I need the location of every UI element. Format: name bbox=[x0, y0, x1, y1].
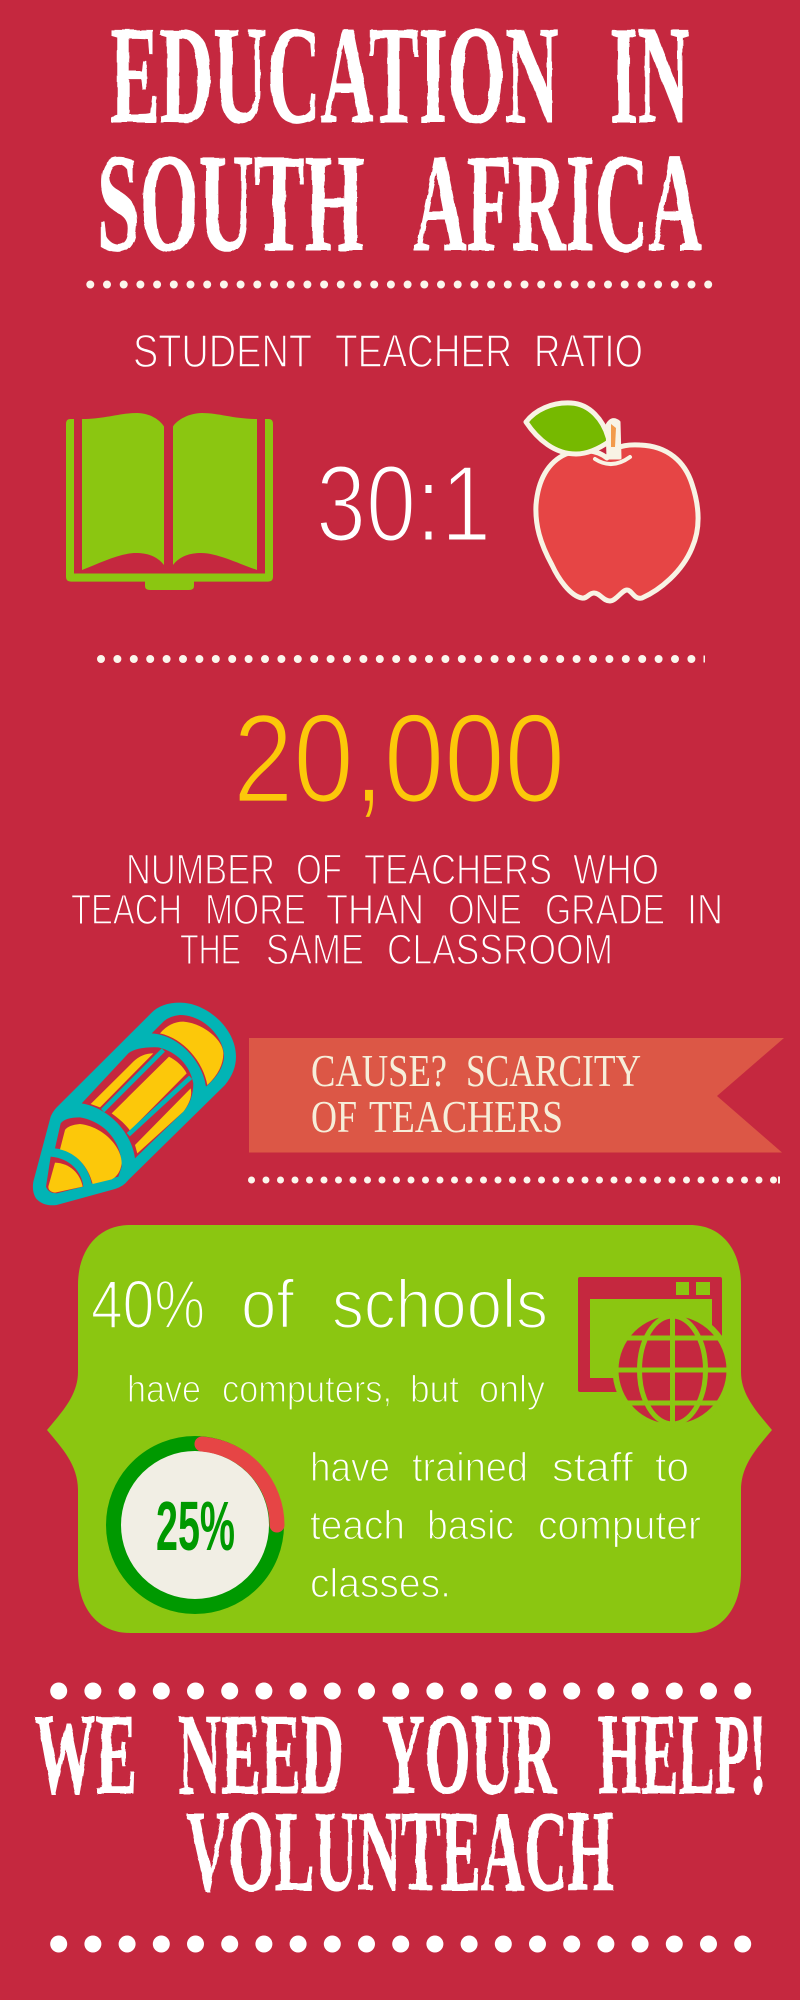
text: trained staff: teach bbox=[310, 1502, 405, 1548]
text: 40% of schools bbox=[91, 1266, 548, 1343]
icon: open book bbox=[66, 413, 273, 590]
heading: student teacher ratio: TEACHER bbox=[335, 325, 512, 377]
ribbon: cause: OF bbox=[311, 1092, 357, 1142]
text: number of teachers: ONE bbox=[448, 886, 522, 934]
text: 40% of schools: 40% bbox=[91, 1266, 205, 1343]
text: number of teachers: CLASSROOM bbox=[387, 926, 613, 974]
icon: apple bbox=[526, 403, 698, 601]
text: number of teachers: IN bbox=[687, 886, 723, 934]
text: number of teachers: GRADE bbox=[545, 886, 665, 934]
text: number of teachers: OF bbox=[296, 846, 342, 894]
icon: pencil bbox=[33, 1003, 236, 1205]
text: have computers: computers, bbox=[222, 1369, 392, 1411]
text: trained staff: trained bbox=[412, 1444, 528, 1490]
text: 40% of schools: of bbox=[241, 1266, 295, 1343]
text: trained staff: have bbox=[310, 1444, 390, 1490]
text: number of teachers: THE bbox=[180, 926, 241, 974]
call to action: NEED bbox=[178, 1691, 344, 1818]
heading: student teacher ratio: RATIO bbox=[534, 325, 643, 377]
text: number of teachers: TEACHERS bbox=[364, 846, 552, 894]
stat: 30:1: 30:1 bbox=[316, 443, 491, 565]
ribbon: cause: SCARCITY bbox=[466, 1046, 641, 1096]
text: trained staff: computer bbox=[538, 1502, 701, 1548]
stat: 20,000: 20,000 bbox=[233, 688, 565, 829]
text: have computers: but bbox=[410, 1369, 459, 1411]
heading: student teacher ratio bbox=[133, 325, 643, 377]
icon: browser globe bbox=[578, 1277, 732, 1430]
title: SOUTH bbox=[97, 126, 364, 281]
text: have computers: have bbox=[127, 1369, 201, 1411]
ribbon: cause: TEACHERS bbox=[369, 1092, 563, 1142]
call to action bbox=[34, 1691, 767, 1915]
text: have computers bbox=[127, 1369, 545, 1411]
ribbon: cause: CAUSE? bbox=[311, 1046, 447, 1096]
text: number of teachers: TEACH bbox=[71, 886, 182, 934]
panel: computers bbox=[47, 1225, 772, 1633]
text: trained staff: staff bbox=[552, 1444, 634, 1490]
heading: student teacher ratio: STUDENT bbox=[133, 325, 312, 377]
call to action: YOUR bbox=[382, 1691, 557, 1818]
text: trained staff bbox=[310, 1444, 701, 1606]
text: number of teachers: WHO bbox=[573, 846, 659, 894]
text: trained staff: basic bbox=[427, 1502, 514, 1548]
text: number of teachers bbox=[71, 846, 723, 974]
ribbon: cause bbox=[249, 1038, 784, 1152]
chart: 25% donut bbox=[114, 1444, 277, 1606]
text: number of teachers: THAN bbox=[326, 886, 424, 934]
text: trained staff: to bbox=[655, 1444, 689, 1490]
text: number of teachers: NUMBER bbox=[126, 846, 275, 894]
chart: 25% donut: 25% bbox=[156, 1487, 235, 1565]
call to action: WE bbox=[34, 1691, 137, 1818]
text: number of teachers: MORE bbox=[205, 886, 306, 934]
title bbox=[97, 0, 702, 281]
text: have computers: only bbox=[479, 1369, 545, 1411]
text: 40% of schools: schools bbox=[332, 1266, 548, 1343]
title: IN bbox=[610, 0, 689, 153]
text: trained staff: classes. bbox=[310, 1560, 451, 1606]
text: number of teachers: SAME bbox=[266, 926, 364, 974]
